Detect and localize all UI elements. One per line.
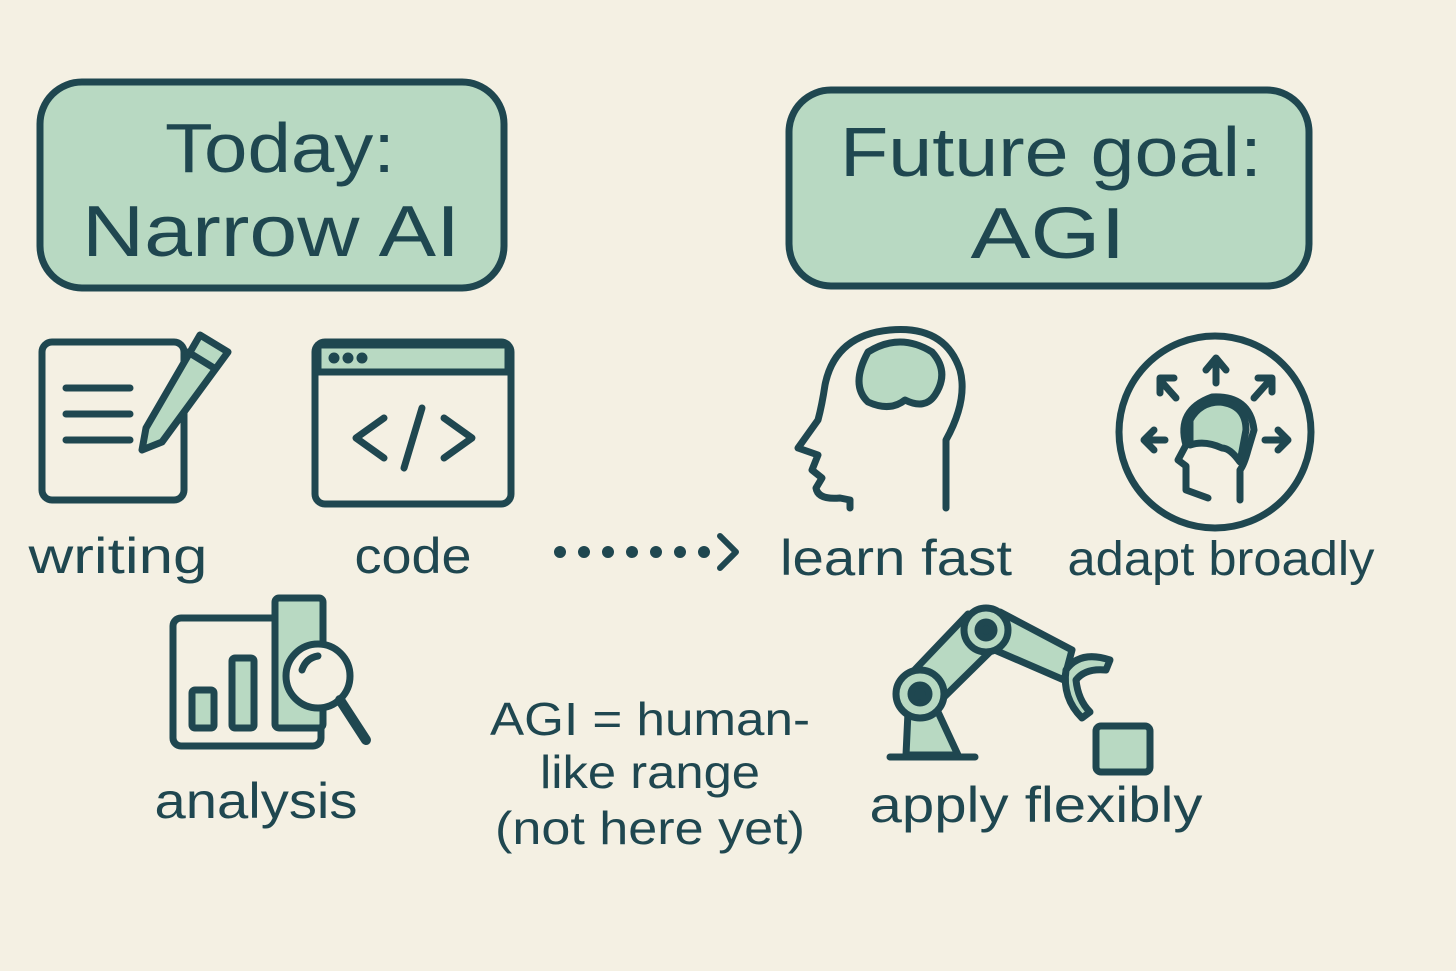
title box: today narrow AI: Today: [165,109,395,187]
label: apply flexibly: apply flexibly [870,777,1202,833]
title box: today narrow AI: Narrow AI [82,192,460,272]
label: adapt broadly: adapt broadly [1068,533,1374,586]
icon: code window [315,342,511,504]
title box: future goal AGI [789,90,1309,286]
text block: AGI definition: like range [540,746,760,798]
icon: writing document with pencil [42,335,228,500]
text block: AGI definition: (not here yet) [495,802,805,854]
text block: AGI definition [490,693,810,854]
title box: future goal AGI: AGI [970,194,1126,274]
text block: AGI definition: AGI = human- [490,693,810,745]
title box: future goal AGI: Future goal: [840,113,1262,191]
label: analysis: analysis [154,773,358,829]
icon: adapt broadly circle [1119,336,1311,528]
arrow: dotted [557,536,736,568]
title box: today narrow AI [40,82,504,288]
icon: head with brain [798,330,962,508]
icon: robot arm [890,608,1150,772]
label: learn fast: learn fast [780,530,1012,586]
label: writing: writing [27,528,208,584]
label: code: code [354,528,472,584]
icon: analysis chart with magnifier [173,598,366,746]
